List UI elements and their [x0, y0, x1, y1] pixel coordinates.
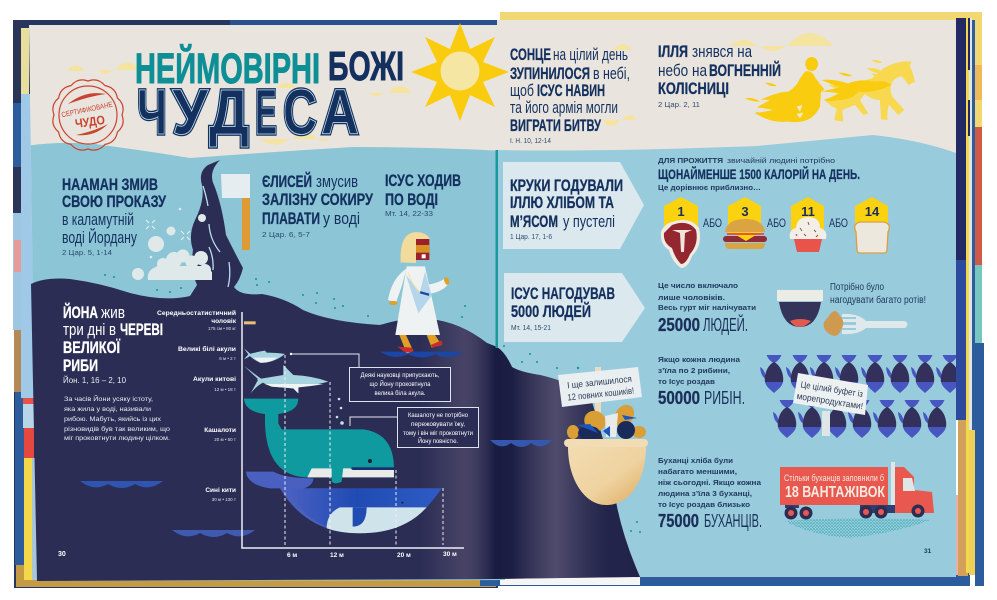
panel: Jesus feeds 5000: ІСУС НАГОДУВАВ [511, 284, 615, 303]
text: many mouths [830, 281, 926, 306]
chart row labels: 12 м • 18 т [214, 387, 236, 392]
text block: Jonah: ВЕЛИКОЇ [63, 338, 121, 357]
callout: sperm whale [350, 408, 478, 448]
panel: ravens feed Elijah: М’ЯСОМ [510, 212, 558, 231]
text block: Jesus walks on water: ПО ВОДІ [385, 190, 438, 209]
title: Е [255, 76, 277, 148]
food equivalents: АБО [703, 216, 722, 230]
title: С [283, 76, 317, 148]
text block: Elisha: ЗАЛІЗНУ СОКИРУ [262, 190, 373, 209]
icon: steak [661, 197, 700, 268]
icon: steak: 1 [677, 204, 685, 219]
food equivalents: АБО [829, 216, 848, 230]
axis labels: 6 м [287, 552, 297, 559]
chart row labels: Середньостатистичний [157, 309, 236, 317]
title: У [172, 76, 209, 148]
text block: 1500 calories: ЩОНАЙМЕНШЕ 1500 КАЛОРІЙ НА ДЕНЬ. [658, 165, 860, 182]
decorative clouds [67, 33, 833, 144]
icon: tiny man [244, 321, 256, 324]
sign: twelve baskets [558, 367, 642, 407]
title: Ч [137, 76, 167, 148]
stamp: certified miracle: СЕРТИФІКОВАНЕ [61, 100, 113, 119]
teal dots [104, 274, 641, 533]
text block: 75000 loaves: то Ісус роздав близько [658, 500, 750, 509]
page number 31: 31 [924, 548, 932, 555]
axis labels: 30 м [443, 551, 457, 558]
text block: Jesus walks on water: Мт. 14, 22-33 [385, 209, 433, 218]
text block: 50000 fish: РИБІН. [704, 388, 745, 408]
text block: Elisha: ЄЛИСЕЙ [262, 172, 312, 191]
fish grid [760, 355, 959, 438]
text block: 75000 loaves: БУХАНЦІВ. [704, 511, 762, 531]
text block: Naaman: НААМАН ЗМИВ [62, 175, 158, 194]
text block: Elisha: 2 Цар. 6, 5-7 [262, 230, 310, 239]
text block: Elijah: 2 Цар. 2, 11 [658, 100, 700, 109]
callout: great white shark: велика біла акула. [374, 391, 426, 397]
text block: sun stands still: на цілий день [553, 45, 628, 64]
icon: truck [780, 462, 934, 538]
title: А [321, 76, 359, 148]
text block: Naaman: в каламутній [62, 210, 134, 229]
icon: Jesus on water [380, 232, 464, 357]
text block: 50000 fish: з’їла по 2 рибини, [658, 366, 730, 375]
text block: Elijah: ІЛЛЯ [658, 42, 688, 61]
callout: sperm whale: тому і він міг проковтнути [403, 431, 473, 437]
food equivalents [661, 197, 889, 268]
icon: mouth and fork [777, 290, 908, 336]
text: many mouths: нагодувати багато ротів! [830, 294, 926, 306]
axes [242, 312, 464, 548]
panel: ravens feed Elijah [503, 162, 644, 249]
icon: sperm whale [244, 399, 394, 483]
text block: sun stands still: ІСУС НАВИН [537, 81, 605, 100]
text block: Jonah: різновидів був так великим, що [64, 425, 170, 433]
text block: Elisha [262, 172, 373, 239]
water background right [497, 135, 956, 578]
axis labels: 12 м [330, 552, 344, 559]
stamp: certified miracle: ЧУДО [74, 113, 106, 131]
whale bubbles [336, 398, 344, 425]
text block: Jonah: міг проковтнути людину цілком. [64, 434, 170, 442]
text block: 1500 calories: ДЛЯ ПРОЖИТТЯ [658, 156, 723, 165]
icon: bread [855, 197, 889, 253]
chart row labels: 6 м • 2 т [219, 356, 236, 361]
text block: Elisha: змусив [316, 172, 358, 191]
text block: sun stands still [510, 45, 630, 145]
panel: ravens feed Elijah: ІЛЛЮ ХЛІБОМ ТА [510, 193, 614, 212]
wave: left deep [80, 481, 163, 488]
callout: sperm whale: пережовувати їжу, [411, 422, 465, 428]
text block: Jesus walks on water: ІСУС ХОДИВ [385, 171, 461, 190]
text block: 50000 fish: то Ісус роздав [658, 377, 715, 386]
callout: great white shark [290, 353, 450, 402]
text block: Jonah: яка жила у воді, називали [64, 405, 151, 413]
chart row labels [157, 309, 237, 502]
chart row labels: Кашалоти [204, 427, 236, 434]
icon: truck: 18 ВАНТАЖІВОК [785, 484, 885, 501]
icon: bread: 14 [865, 204, 880, 219]
panel: ravens feed Elijah: у пустелі [563, 212, 615, 231]
text block: 75000 loaves: людина з’їла 3 буханці, [658, 489, 752, 498]
text block: Jonah: Йон. 1, 16 – 2, 10 [63, 376, 127, 385]
chart row labels: 20 м • 50 т [214, 437, 236, 442]
chart row labels: Акули китові [193, 375, 236, 383]
text block: sun stands still: щоб [510, 81, 534, 100]
chart row labels: Великі білі акули [178, 345, 236, 353]
title [135, 43, 404, 148]
title: БОЖІ [328, 43, 404, 89]
creatures [244, 321, 442, 533]
text block: Jonah [63, 303, 170, 442]
wave: under chart [172, 530, 255, 537]
icon: whale shark [244, 365, 328, 393]
text block: Elijah: небо на [658, 61, 707, 80]
text block: 25000 people: лише чоловіків. [658, 293, 725, 302]
chart row labels: чоловік [211, 317, 237, 325]
panel: ravens feed Elijah: 1 Цар. 17, 1-6 [510, 232, 552, 241]
text block: Jonah: ЙОНА [63, 303, 98, 322]
icon: small shark [244, 348, 285, 363]
water background left [25, 143, 505, 584]
text block: 1500 calories: Це дорівнює приблизно… [658, 183, 761, 192]
icon: sun [411, 23, 509, 121]
text block: Elijah: знявся на [692, 42, 752, 61]
title: Ч [137, 76, 167, 148]
text block: Elisha: у воді [323, 209, 360, 228]
chart row labels: 175 см • 80 кг [208, 326, 236, 331]
chart row labels: Сині кити [205, 486, 236, 494]
text block: 1500 calories: звичайній людині потрібно [727, 157, 835, 165]
panel: ravens feed Elijah: КРУКИ ГОДУВАЛИ [510, 176, 623, 195]
text block: Naaman: СВОЮ ПРОКАЗУ [62, 192, 166, 211]
sign: seafood buffet: морепродуктами! [796, 391, 864, 411]
text block: Naaman: воді Йордану [62, 228, 137, 247]
text block: Elijah: КОЛІСНИЦІ [658, 79, 729, 98]
title: У [172, 76, 209, 148]
icon: truck: Стільки буханців заповнили б [784, 473, 884, 483]
page number 30: 30 [58, 551, 66, 558]
title: Д [209, 76, 249, 148]
text block: Jonah: рибою. Мабуть, якийсь із цих [64, 415, 162, 423]
text block: 75000 loaves [658, 456, 762, 531]
text block: Elijah [658, 42, 781, 109]
icon: blue whale [246, 472, 442, 533]
text block: Jonah: жив [101, 303, 125, 322]
text block: 25000 people [658, 281, 756, 335]
text block: 75000 loaves: ніж сьогодні. Якщо кожна [658, 478, 762, 487]
left page [25, 24, 505, 584]
callout: great white shark: Деякі науковці припускають, [360, 373, 440, 379]
panel: Jesus feeds 5000 [504, 273, 645, 342]
text block: sun stands still: ЗУПИНИЛОСЯ [510, 64, 590, 83]
text block: Jonah: три дні в [63, 320, 116, 339]
callout: great white shark: що Йону проковтнула [370, 380, 431, 388]
text: many mouths: Потрібно було [830, 281, 884, 293]
icon: burger: 3 [741, 204, 749, 219]
text block: Elijah: ВОГНЕННІЙ [709, 61, 781, 80]
text block: Jesus walks on water [385, 171, 461, 218]
text block: sun stands still: та його армія могли [510, 98, 618, 117]
text block: sun stands still: І. Н. 10, 12-14 [510, 136, 551, 145]
panel: Jesus feeds 5000: 5000 ЛЮДЕЙ [511, 302, 591, 321]
river and sea floor [31, 150, 640, 581]
text block: 50000 fish: 50000 [658, 388, 700, 408]
axis labels [287, 551, 457, 559]
icon: fiery chariot [745, 57, 915, 122]
text block: 25000 people: ЛЮДЕЙ. [703, 314, 748, 335]
sign: seafood buffet [793, 373, 868, 436]
text block: sun stands still: СОНЦЕ [510, 45, 551, 64]
icon: burger [723, 197, 767, 249]
chart row labels: 30 м • 130 т [212, 497, 236, 502]
icon: axe [221, 174, 250, 250]
text block: sun stands still: в небі, [593, 64, 630, 83]
callout: sperm whale: Кашалоту не потрібно [408, 413, 469, 419]
right page [497, 20, 957, 578]
text block: 50000 fish [658, 355, 745, 408]
text block: 50000 fish: Якщо кожна людина [658, 355, 741, 364]
sign: twelve baskets: І ще залишилося [567, 374, 632, 390]
icon: basket with sign [564, 367, 648, 505]
axis labels: 20 м [397, 552, 411, 559]
sign: seafood buffet: Це цілий буфет із [800, 379, 864, 399]
panel: Jesus feeds 5000: Мт. 14, 15-21 [511, 323, 551, 332]
text block: 25000 people: Це число включало [658, 281, 738, 290]
text block: 75000 loaves: Буханці хліба були [658, 456, 733, 465]
text block: 25000 people: Весь гурт міг налічувати [658, 303, 756, 312]
title: С [283, 76, 317, 148]
title: Е [255, 76, 277, 148]
text block: Naaman: 2 Цар. 5, 1-14 [62, 248, 112, 257]
title: НЕЙМОВІРНІ [135, 44, 320, 93]
icon: foam and bubbles [132, 208, 212, 280]
text block: 75000 loaves: набагато меншими, [658, 467, 737, 476]
title: А [321, 76, 359, 148]
text block: 75000 loaves: 75000 [658, 511, 699, 531]
callout: sperm whale: Йону повністю. [418, 437, 458, 445]
text block: 1500 calories [658, 156, 860, 192]
text block: 25000 people: 25000 [658, 315, 700, 335]
chart: creature size comparison [157, 309, 478, 559]
text block: Elisha: ПЛАВАТИ [262, 209, 320, 228]
text block: Naaman [62, 175, 166, 257]
wave: gutter [490, 440, 552, 447]
text block: Jonah: За часів Йони усяку істоту, [64, 394, 153, 403]
food equivalents: АБО [767, 216, 786, 230]
sign: twelve baskets: 12 повних кошиків! [567, 385, 635, 402]
title: Д [209, 76, 249, 148]
icon: cupcake: 11 [801, 204, 815, 219]
stamp: certified miracle [53, 80, 123, 150]
text block: Jonah: ЧЕРЕВІ [120, 320, 163, 339]
text block: sun stands still: ВИГРАТИ БИТВУ [510, 116, 601, 135]
text block: Jonah: РИБИ [63, 356, 98, 375]
icon: cupcake [790, 197, 826, 252]
